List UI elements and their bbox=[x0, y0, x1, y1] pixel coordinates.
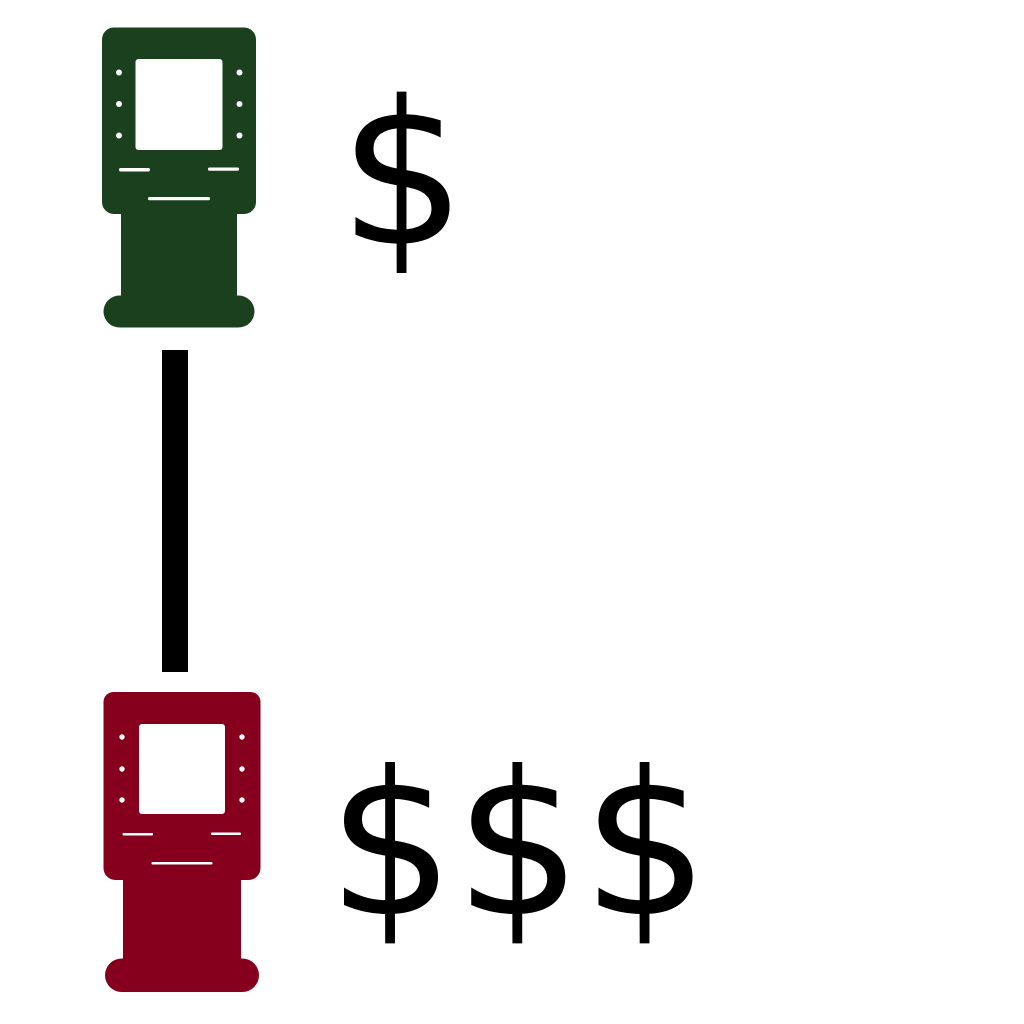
icon: red kiosk (high cost) bbox=[104, 692, 260, 992]
connector bar bbox=[162, 350, 188, 672]
triple dollar signs: $$$ bbox=[327, 729, 709, 962]
single dollar sign: $ bbox=[339, 59, 466, 292]
icon: green kiosk (low cost) bbox=[102, 28, 256, 328]
